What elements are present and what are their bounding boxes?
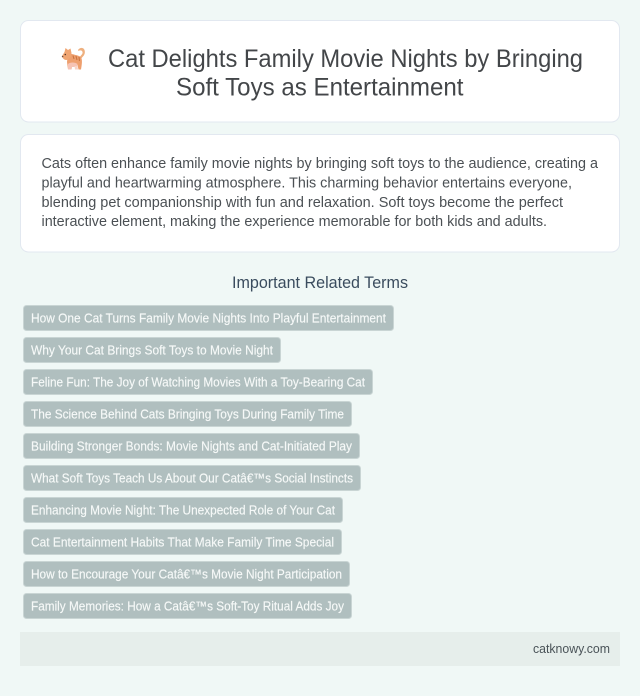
tag 2	[24, 338, 280, 362]
tag 8	[24, 530, 342, 554]
tag 10: Family Memories: How a Catâ€™s Soft-Toy Ritual Adds Joy	[31, 598, 345, 614]
tag 3	[24, 370, 372, 394]
tag 3: Feline Fun: The Joy of Watching Movies With a Toy-Bearing Cat	[31, 374, 365, 390]
tag 10	[24, 594, 352, 618]
tag 2: Why Your Cat Brings Soft Toys to Movie Night	[31, 342, 273, 358]
tag 4	[24, 402, 352, 426]
title text: Cat Delights Family Movie Nights by Bringing	[108, 45, 583, 73]
tag 5	[24, 434, 360, 458]
panel: title card	[20, 20, 620, 122]
heading: related terms: Important Related Terms	[232, 274, 408, 292]
tag list	[24, 306, 394, 618]
tag 8: Cat Entertainment Habits That Make Family Time Special	[31, 534, 334, 550]
tag 6	[24, 466, 360, 490]
title text: Soft Toys as Entertainment	[176, 74, 464, 102]
tag 9: How to Encourage Your Catâ€™s Movie Night Participation	[31, 566, 342, 582]
tag 1	[24, 306, 394, 330]
tag 7: Enhancing Movie Night: The Unexpected Role of Your Cat	[31, 502, 335, 518]
description text: Cats often enhance family movie nights by bringing soft toys to the audience, creating a	[42, 155, 599, 172]
tag 9	[24, 562, 350, 586]
description text: interactive element, making the experience memorable for both kids and adults.	[42, 213, 547, 230]
panel: description card	[20, 134, 620, 252]
tag 4: The Science Behind Cats Bringing Toys During Family Time	[31, 406, 344, 422]
tag 1: How One Cat Turns Family Movie Nights Into Playful Entertainment	[31, 310, 386, 326]
footer text: catknowy.com	[533, 641, 610, 656]
description text: blending pet companionship with fun and relaxation. Soft toys become the perfect	[42, 194, 564, 211]
tag 5: Building Stronger Bonds: Movie Nights and Cat-Initiated Play	[31, 438, 353, 454]
description text: playful and heartwarming atmosphere. This charming behavior entertains everyone,	[42, 174, 572, 192]
footer	[20, 632, 620, 666]
icon: cat	[62, 48, 85, 70]
tag 7	[24, 498, 342, 522]
tag 6: What Soft Toys Teach Us About Our Catâ€™s Social Instincts	[31, 470, 353, 486]
title text	[108, 45, 583, 102]
description text	[42, 155, 599, 230]
